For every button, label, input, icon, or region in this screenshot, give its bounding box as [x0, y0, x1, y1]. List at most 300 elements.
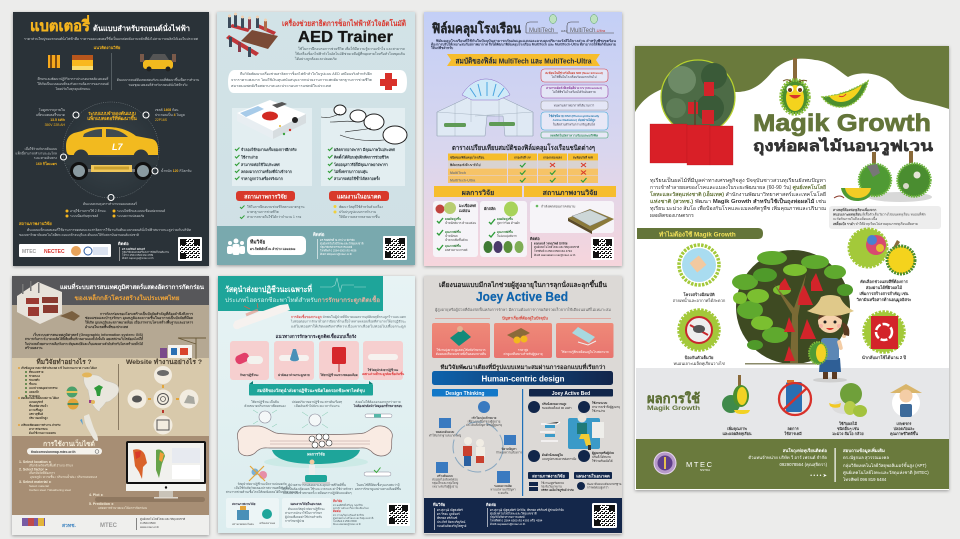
usage steps: 1. Select location ►	[19, 460, 52, 464]
badge text: reuse: นำกลับมาใช้ได้นาน 2 ปี	[862, 354, 906, 360]
card: oral medicine: กินยาปฏิชีวนะ	[240, 372, 259, 378]
badge text: pest	[673, 354, 725, 367]
intro paragraph	[649, 176, 827, 219]
contact: ติดต่อ	[313, 231, 325, 237]
label: research status	[528, 472, 569, 479]
method list: ความชื้นสูง	[29, 407, 43, 413]
feature list right	[333, 146, 395, 181]
bed features: แบบรูปทรงสะดวกต่อการนั่ง	[542, 457, 577, 461]
panel: research status	[530, 201, 614, 234]
property boxes: Active Radiation) ส่องผ่านได้สูง	[553, 117, 596, 123]
research status heading: สถานภาพงานวิจัย	[19, 221, 52, 226]
footer band: ประภัสร์ มิตรเจริญรัตน์	[437, 520, 465, 524]
feature list right: สามารถต่อใช้ซ้ำได้หลายครั้ง	[334, 175, 380, 181]
logos footer: ศูนย์เทคโนโลยีโลหะและวัสดุแห่งชาติ	[140, 517, 185, 522]
illustration: building under construction	[17, 281, 80, 324]
card: surgery	[274, 341, 314, 380]
contact: โทรศัพท์ 0 2564 6500 ต่อ 4636	[320, 248, 357, 252]
subheading: problems	[435, 314, 611, 322]
enquiry text: โทรศัพท์ 096 819 6484	[843, 476, 887, 482]
illustration: meeting room	[226, 12, 278, 57]
logo: MTEC: MTEC	[686, 460, 713, 469]
team and contact: พรรณี วงศ์ มหาวิทยาลัยเชียงใหม่	[333, 506, 369, 510]
step labels	[429, 415, 523, 495]
intro paragraph: ใช้ในการฝึกอบรมการช่วยชีวิต เพื่อให้มีความรู้ความเข้าใจ และสามารถ	[298, 46, 405, 51]
enquiry text: กลุ่มวิจัยเทคโนโลยีวัสดุพอลิเมอร์ขั้นสูง (APT)	[843, 462, 927, 469]
logo: MultiTech-Ultra: MultiTech-Ultra	[570, 28, 606, 34]
intro paragraph	[290, 313, 406, 328]
results band	[636, 368, 949, 439]
card: IV	[319, 341, 359, 380]
card: cost: ราคาสูง	[518, 348, 529, 352]
results text: ปลอดภัยและ	[893, 425, 915, 431]
results text: ใช้กับผลไม้	[839, 420, 858, 426]
button: future plan	[329, 191, 389, 201]
illustration: bone	[233, 303, 290, 329]
usage steps: แสดงการทำนายแนวโน้มการกัดกร่อน	[98, 506, 147, 510]
heading: battery: แบตเตอรี่	[30, 15, 91, 35]
intro paragraph: ให้แก่พืชสำหรับ	[431, 45, 453, 50]
results text: มะม่วง ส้มโอ กล้วย	[832, 430, 864, 436]
logos strip	[19, 244, 111, 257]
results label	[272, 450, 360, 464]
property boxes: สามารถตัดรังสีเหนือสีม่วง UV (Ultraviolet)	[546, 85, 602, 90]
panel: melon and tomato results: ผลสวยงาม เกรดดี	[445, 248, 467, 252]
research status text	[19, 226, 191, 238]
QR code	[178, 237, 202, 261]
spec text left 2	[16, 146, 57, 166]
panel: device features left	[232, 100, 312, 186]
spec text left 1: 350V 22B AH	[45, 123, 66, 127]
photo: durian tree with red bags	[661, 60, 735, 134]
status details: รองรับวันแรงงาน	[541, 484, 562, 488]
card: injuries: ต้องคอยเรียกคนช่วยทั้งในตอนกลางคืน	[436, 351, 486, 356]
heading: woven bag: ถุงห่อผลไม้นอนวูฟเวน	[753, 136, 934, 156]
QR code	[591, 237, 614, 260]
results text: ลดการ	[787, 426, 800, 431]
feature list right: ไม่ทิ้งคราบกาวบนหุ่น	[333, 168, 368, 175]
comparison table: กรองรังสี UV	[514, 156, 531, 160]
intro paragraph	[85, 310, 193, 329]
card: bed	[556, 323, 614, 358]
property text: ด้วยขนาดปริมาณยาเพียงหนอง	[244, 404, 286, 408]
bottom features: ระบบป้องกันทุกเซลล์	[70, 214, 98, 219]
panel: electrode features right	[321, 105, 407, 186]
callout: causes of durian damage: สาเหตุที่ต้องห่อทุเรียนเนื่องจาก	[833, 207, 876, 213]
QR code	[387, 503, 410, 526]
map of Thailand	[80, 372, 119, 441]
feature list right: ผลิตจากยางพารา มีคุณภาพในประเทศ	[334, 146, 395, 153]
method list: ชั้นบน	[29, 381, 37, 386]
method list: เปรียบเทียบผลการทำงาน สำหรับ	[21, 422, 61, 427]
banner: human-centric design	[432, 371, 613, 385]
footer band: กลุ่มวิจัยวิศวกรรมการแพทย์	[490, 515, 525, 520]
spec text left 1: แพ็กแบตเตอรี่ขนาด	[36, 111, 65, 117]
method list: ค่าการกัดกร่อน	[29, 427, 48, 431]
spec text left 2: 160 กิโลเมตร	[36, 161, 57, 166]
comparison table: ชนิดของฟิล์มคลุมโรงเรือน	[450, 154, 485, 160]
step labels: ระดมความคิด	[494, 483, 512, 488]
property boxes	[541, 69, 608, 138]
plan text: พัฒนาวัสดุที่ใช้สำหรับตัวเครื่อง	[339, 204, 383, 210]
logo: MultiTech-Ultra	[567, 14, 614, 34]
method list: แนวป่าเขตอุตสาหกรรม	[29, 385, 58, 391]
footer band: ดร.ศุภวุฒิ ณัฐพงศ์ศรี	[437, 508, 463, 513]
banner: human-centric design: Human-centric design	[482, 374, 565, 384]
diagram: car with battery pack	[63, 102, 159, 198]
concept text right: ต้นแบบรถยนต์ต้องทดสอบกับระบบที่พัฒนาขึ้นเพื่อการทำงาน	[117, 77, 200, 82]
URL search box	[27, 448, 102, 454]
step labels: ทดสอบต้นแบบ	[436, 429, 454, 434]
design thinking cycle	[429, 401, 523, 495]
panel: greenhouse film poster	[424, 12, 622, 266]
contact: อีเมล napongs@mtec.or.th	[122, 256, 154, 260]
results text	[722, 420, 918, 437]
method list: ต้องใช้งานความคงทน	[29, 430, 56, 435]
contact: โทรศัพท์ 0 2564 6500 ต่อ 4794	[534, 249, 572, 253]
heading bar: why use Magik Growth: ทำไมต้องใช้ Magik Growth	[659, 230, 736, 238]
footer band	[636, 439, 949, 489]
bed features	[528, 400, 620, 463]
banner: properties: สมบัติของวัสดุนำส่งยาปฏิชีวนะชนิดไฮดรอกซีอะพาไทต์ชุบ	[257, 387, 365, 394]
contact: ดอกเตอร์ วรรณวิทย์ นักวิจัย	[534, 242, 568, 246]
illustration: AED device	[237, 100, 306, 139]
research status text: ต้นแบบแพ็กแบตเตอรี่ใช้งานการทดสอบและสาธิตการใช้งานกับต้นแบบรถยนต์นั่งไฟฟ้าสมรรถนะสูงร่วมกับบริษัท	[27, 226, 191, 232]
intro paragraph: อำเภอในเขตพื้นที่ของประเทศ	[85, 323, 129, 329]
icons: spheres and bone	[253, 410, 392, 428]
contact: ศูนย์เทคโนโลยีโลหะและวัสดุแห่งชาติ	[534, 245, 579, 250]
bottom features: อายุใช้งานการใช้ 2 ล้านม.	[70, 209, 107, 214]
results label: ผลการวิจัย	[307, 452, 325, 456]
bed features: ใช้งานง่าย	[592, 409, 605, 413]
footer band: ศูนย์เทคโนโลยีโลหะและวัสดุแห่งชาติ	[490, 512, 537, 516]
plan details: การทดสอบสูงกว่า	[587, 486, 609, 490]
research status text: ของมหาวิทยาลัยเทคโนโลยีพระจอมเกล้าธนบุรีและต้นแบบให้กับสถาบันยานยนต์แห่งชาติ	[19, 232, 139, 238]
header band	[218, 276, 383, 311]
feature list left	[241, 146, 297, 182]
result text	[226, 482, 402, 496]
website flow diagram	[128, 366, 198, 434]
heading: Thai title: เตียงนอนแบบมีกลไกช่วยผู้สูงอายุในการลุกนั่งและลุกขึ้นยืน	[439, 279, 608, 290]
mascot: durian	[781, 58, 809, 114]
status details	[529, 481, 574, 493]
concept text left	[37, 76, 109, 92]
property boxes: ไม่ให้พื้นในโรงเรือนร้อนมากเกินไป	[551, 74, 597, 79]
heading bar: why use Magik Growth	[637, 228, 763, 239]
panel: corrosion map poster	[12, 276, 209, 535]
footer band	[217, 226, 415, 265]
badge text: structure: โครงสร้างมีสมบัติ	[682, 291, 715, 297]
heading band: status: สถานภาพงานวิจัย	[543, 189, 597, 197]
distributor text: ตัวแทนจำหน่าย บริษัท วี อาร์ เฟรนด์ จำกัด	[748, 455, 827, 460]
method list: เก็บข้อมูลจากสถานีทั่วประเทศ 3 ปี ในสภาพอากาศ 7 แห่ง ได้แก่	[21, 365, 97, 371]
property text: ปล่อยปริมาณยาปฏิชีวนะสารต้นเรื่อยๆ	[292, 399, 343, 405]
intro line: ผู้สูงอายุหรือผู้ป่วยที่ต้องพักฟื้นหลังการรักษา มีความต้องการการผลิตรวดเร็วจากใช้เตียงนอนที่ไม่เหมาะสม	[435, 306, 612, 313]
future plan card: สามารถนำมาใช้ในการรักษา	[285, 511, 323, 515]
icon: durian quality	[722, 375, 750, 414]
white info box: จากราคาแพงมาก โดยใช้เงินทุนสนับสนุนจากหน่วยงานการแพทย์มาตรฐานการช่วยชีวิต	[231, 77, 372, 83]
icon: mechanics and yellow car	[140, 54, 176, 72]
illustration: damaged durians	[834, 151, 932, 202]
badge: colour filter	[849, 229, 915, 274]
footer band: ดร.รัชตะ มูลจันทร์	[437, 512, 460, 516]
usage steps: 4. Plot ►	[89, 493, 104, 497]
usage steps: เลือกจังหวัดหรือพื้นที่ อำเภอ ตำบล	[29, 462, 73, 468]
badge: weather proof	[679, 245, 719, 285]
property text: ส่งผงไม่ให้ต้องเอาออกจากร่างกาย	[355, 400, 401, 404]
usage steps: 3. Select material ►	[19, 480, 52, 484]
future plan card: แผนงานวิจัยในอนาคต	[291, 501, 321, 506]
intro paragraph: ให้เกิด อุณหภูมิและสภาพแวดล้อม เมื่อเราทราบโครงสร้างพื้นฐานและอาคาร	[85, 318, 193, 326]
feature list left: จำลองใช้รองานครั้นของการฝึกจริง	[241, 146, 297, 152]
heading	[60, 282, 205, 302]
heading: ของเหล็กกล้าโครงสร้างในประเทศไทย	[74, 293, 180, 302]
car logo: L7	[112, 142, 123, 152]
usage steps: 2. Select factor ►	[19, 468, 48, 472]
result text: ไม่ต้องผ่าตัดซ้ำหลายครั้ง เหมือนการปฏิบัติแบบเดิมๆ	[281, 490, 352, 496]
heading band: results: ผลการวิจัย	[462, 189, 494, 197]
logo: MTEC: NSTDA	[700, 468, 710, 472]
icon: farmer	[890, 384, 922, 417]
panel: lettuce results: ผักสลัด	[484, 206, 496, 211]
badge text: colour: คัดเลือกช่วงแสงสีที่ต้องการ	[860, 278, 909, 284]
panel: melon and tomato results: น้ำหนักผล	[445, 233, 458, 238]
plan details: พัฒนาต้นแบบเตียงมาตรฐาน	[587, 482, 622, 486]
result text: ในคนไข้ที่มีติดเชื้อรุนแรงพบว่ามี	[356, 482, 400, 488]
distributor text: 0929078564 (คุณสุจิตรา)	[780, 462, 828, 468]
subheading: problems: ปัญหาเรื่องที่ต้องคู่ในปัจจุบัน	[502, 314, 548, 322]
step labels: กำหนดความต้องการ	[496, 450, 523, 454]
method list: แหล่งน้ำ	[29, 389, 40, 394]
enquiry text	[843, 447, 929, 482]
status text	[240, 204, 305, 219]
spec text left 1: โมดูลบรรจุภายใน	[39, 107, 66, 113]
status card	[226, 498, 279, 528]
usage steps: อุณหภูมิ / ความชื้น / ปริมาณน้ำฝน / ปริมาณลมทะเล	[30, 474, 97, 480]
method list	[18, 365, 97, 435]
banner: film properties	[447, 54, 600, 66]
callout: causes of durian damage: จะกัดกินภายในถึงเมล็ดและเนื้อ	[833, 215, 877, 221]
contact: กลุ่มวิจัยวิศวกรรมการแพทย์	[320, 245, 353, 250]
team box: ทีมวิจัย	[250, 238, 265, 246]
heading: AED red line: เครื่องช่วยสาธิตการช็อกไฟฟ้าหัวใจอัตโนมัติ	[282, 17, 406, 28]
panel: melon and tomato results	[433, 201, 478, 257]
step icons	[436, 401, 516, 483]
future plan card	[282, 498, 331, 528]
label: future plan	[574, 472, 612, 479]
badge text: structure	[673, 291, 726, 303]
heading band: status	[524, 186, 616, 197]
plan details	[577, 482, 622, 490]
button: future plan: แผนงานในอนาคต	[337, 192, 381, 200]
property text: ให้ยาปฏิชีวนะเป็นยืน	[251, 398, 280, 404]
heading: Magik Growth: Magik Growth	[753, 110, 931, 137]
heading: research team method: ทีมวิจัยทำอย่างไร ?	[36, 357, 92, 366]
step labels: หาแนวทางแก้ปัญหา	[490, 488, 516, 492]
result text: ผลการรักษาดูแลผ่านทางเลือดดีขึ้น	[355, 486, 402, 491]
status card: สถานะทดสอบในคน	[232, 522, 254, 526]
comparison table: ฟิล์มกรองรังสี UV ทั่วไป	[450, 162, 481, 167]
feature list left: ใช้งานง่าย	[241, 154, 258, 160]
property boxes: ลดผลิตในอัตราความร้อนและแก๊สพิษ	[550, 132, 598, 138]
card: injuries	[432, 323, 490, 358]
check marks left	[235, 148, 240, 180]
comparison table: MultiTech	[450, 171, 466, 175]
badge text: structure: ถ่ายเทน้ำและอากาศได้สะดวก	[673, 297, 726, 303]
label: design thinking	[432, 389, 498, 397]
intro paragraph: โลหะและวัสดุแห่งชาติ (เอ็มเทค) สำนักงานพัฒนาวิทยาศาสตร์และเทคโนโลยี	[649, 190, 826, 198]
icon: no chemicals	[779, 380, 811, 415]
heading: greenhouse film: ฟิล์มคลุมโรงเรือน	[432, 20, 521, 37]
QR code	[592, 503, 617, 528]
feature list right: ติดตั้งได้ดีบนหุ่นฝึกหัดการช่วยชีวิต	[333, 154, 389, 160]
callout: system heading: แพ็กแบตเตอรี่ที่พัฒนาขึ้น	[87, 114, 138, 121]
feature list left: ราคาถูกกว่าเครื่องจริงมาก	[241, 175, 284, 182]
intro paragraph: ทุเรียน มะม่วง ส้มโอ เพื่อป้องกันโรคและแมลงศัตรูพืช เพิ่มคุณภาพและปริมาณ	[650, 205, 826, 212]
property boxes: ในสัดส่วนสำหรับการเจริญเติบโต	[553, 122, 595, 126]
bed features: ดันตัวนั่งลงอยู่ใน	[542, 452, 563, 458]
bed features: ใช้งานระบบ	[592, 400, 607, 405]
logo: MultiTech	[526, 14, 558, 34]
illustration: training pads	[321, 105, 407, 144]
result text: ไม่จำเป็นต้องเปิดแผล ใช้ระยะเวลาและค่าใช้จ่ายรักษา	[280, 485, 353, 491]
concept text left: ศึกษาและพัฒนาปฏิกิริยาการประกอบเซลล์แบตเตอรี่	[38, 76, 109, 81]
banner: film properties: สมบัติของฟิล์ม MultiTech และ MultiTech-Ultra	[456, 56, 592, 66]
intro paragraph: ซ่อมแซมและบำรุงรักษา อุณหภูมิและความชื้นในอากาศเป็นปัจจัยที่มีผล	[85, 314, 193, 321]
subheading: ประเภทไฮดรอกซีอะพาไทต์สำหรับ การรักษากระดูกติดเชื้อ	[225, 294, 380, 305]
results text: คุณภาพชีวิตดีขึ้น	[890, 430, 918, 437]
team and contact: ศูนย์เทคโนโลยีโลหะและวัสดุแห่งชาติ	[333, 516, 374, 521]
panel: lettuce results: คุณภาพดีขึ้น	[497, 229, 513, 235]
feature list left: ลดลงมากกว่าเครื่องที่นำเข้าจาก	[241, 168, 293, 174]
panel: lettuce results: ผลผลิตสูงขึ้น	[497, 216, 513, 222]
icon: red cross	[380, 73, 397, 90]
status text: สามารถขายในใช้ได้กว่าจำนวน 1 ราย	[247, 215, 301, 219]
heading: treatments: แนวทางการรักษากระดูกติดเชื้อแบบเรื้อรัง	[276, 332, 356, 340]
button: research status	[236, 191, 295, 201]
panel: bone drug delivery poster	[218, 276, 415, 533]
panel: lettuce results: ใบอ่อนนุ่มดีมาก	[497, 234, 517, 239]
footer band: โทรศัพท์ 0 2564 6500 ต่อ 4393 หรือ 4394	[490, 518, 543, 522]
logo: and: และ	[561, 29, 567, 33]
result text: ผู้ป่วยสามารถปล่อยยาและคุณภาพชีวิตดีขึ้น	[288, 482, 347, 488]
label: Joey Active Bed: Joey Active Bed	[552, 391, 590, 397]
illustration: crane and charts	[160, 338, 206, 359]
subheading: Magik Growth: Magik Growth	[647, 405, 700, 412]
enquiry text: สอบถามข้อมูลเพิ่มเติม	[843, 447, 885, 454]
banner: properties	[249, 381, 373, 396]
badge: reusable bag	[864, 312, 904, 352]
icon: doctor with patient	[302, 460, 330, 484]
heading: AED Trainer: AED Trainer	[298, 29, 393, 46]
markers	[60, 112, 158, 200]
callout: causes of durian damage: หนอนเจาะผลทุเรียน ผีเสื้อตัวเต็มวัยวางไข่บนผลทุเรียน หนอนที่ฟัก	[833, 210, 926, 218]
concept text left: ให้เกิดเป็นแบบแผนที่รองรับความต้องการของรถยนต์	[37, 80, 109, 86]
intro paragraph: ใช้เครื่องช็อกไฟฟ้าหัวใจอัตโนมัติช่วยเหลือผู้ที่หยุดหายใจหรือหัวใจหยุดเต้น	[295, 50, 406, 57]
panel: melon and tomato results: น้ำตาลเพิ่มขึ้นด้วย	[445, 237, 468, 242]
spec text left 1: 13.5 kWh	[50, 118, 65, 122]
spec text right 1: 22P16S	[155, 118, 168, 122]
panel: battery prototype poster	[13, 12, 209, 266]
panel: corrosion map poster: สามารถวิเคราะห์ อาจจะผลิตได้ที่เพียงพื้นบริเวณตามแผนที่ ดังนั้นจึง เผยแพร่ผ่านเว็บไซต์ออนไลน์ให้	[25, 335, 144, 341]
footer band: อีเมล supawutn@mtec.or.th	[490, 522, 526, 526]
spec text left 2: เมื่อใช้ร่วมกับรถต้นแบบ	[25, 146, 57, 151]
result text: เมื่อใช้กับสัตว์ทดลองปราศจากผลที่เกิดขึ้น	[234, 485, 290, 490]
team and contact: อีเมล wanwis@mtec.or.th	[333, 522, 362, 526]
result text: สามารถช่วยต้านเชื้อโรคให้ลดน้อยลงได้ในปริมาณมาก	[226, 489, 298, 494]
white info box: สมาคมแพทย์เรือพยาบาลและประกอบการแพทย์ในประเทศ	[231, 83, 332, 88]
label: design thinking: Design Thinking	[446, 391, 484, 397]
status text: ใช้ในการฝึกอบรมช่วยชีวิตตามมาตรฐาน	[247, 204, 305, 209]
property boxes: สะท้อนในสีช่วงรังสีแดง NIR (Near Infrared)	[545, 70, 603, 75]
property boxes: ไม่ให้พืชในโรงเรือนได้รับอันตราย	[551, 89, 596, 94]
illustration: greenhouse	[437, 79, 533, 136]
method list: ชายแดน	[29, 394, 40, 398]
property text	[244, 398, 402, 409]
panel: corrosion map poster: สร้างผลงาน	[25, 345, 43, 350]
card: cost	[494, 323, 552, 358]
results text: เกษตรกร	[897, 421, 912, 426]
contact: โทร 0 2564 6500 ต่อ 4789	[122, 253, 154, 257]
intro paragraph: ทุเรียนเป็นผลไม้ที่มีมูลค่าทางเศรษฐกิจสูง ปัจจุบันชาวสวนทุเรียนยังพบปัญหา	[650, 176, 826, 184]
circles: map samples	[66, 386, 78, 410]
product: red woven bags	[650, 124, 733, 165]
logo: MultiTech: MultiTech	[529, 28, 554, 34]
footer band: ติดต่อ	[486, 502, 497, 507]
panel: lettuce results: สูงกว่าร้อย ด้านผัก	[497, 221, 520, 225]
spec text right 1: ประกอบเป็น 4 โมดูล	[155, 111, 185, 117]
intro paragraph	[294, 46, 406, 61]
step labels: ต่อยอดไอเดียทดสอบ	[432, 478, 458, 482]
intro paragraph: ฟิล์มคลุมโรงเรือนที่ใช้กันในปัจจุบันสามารถกันฝนและแสงและควบคุมปริมาณรังสีได้บางส่วน สำหรับพืชเขตร้อน	[436, 38, 617, 44]
property boxes: ใช้ดัชนีฉาย PAR (Photosynthetically	[549, 113, 600, 118]
comparison table: กรองกรองแสง	[543, 156, 562, 160]
status text: มาตรฐานการช่วยชีวิต	[247, 209, 279, 214]
panel: melon and tomato results: คุณภาพดีขึ้น	[445, 229, 461, 235]
heading: website method: Website ทำงานอย่างไร ?	[126, 357, 202, 366]
spec text left 1	[36, 107, 66, 127]
panel: melon and tomato results: ผลผลิตสูงขึ้น	[445, 216, 461, 222]
icon: healthy bone	[364, 468, 391, 476]
logos footer: www.mtec.or.th	[140, 525, 159, 529]
step labels: ทำให้มาตรฐานขนาดใหญ่	[429, 434, 462, 438]
contact	[118, 241, 169, 261]
car body	[66, 127, 158, 155]
status details: บริษัท เอเอ็มโซลูชั่นส์ จำกัด	[541, 487, 574, 493]
card: IV: ให้ยาปฏิชีวนะทางหลอดเลือด	[320, 372, 358, 378]
step labels: ระดมกัน	[498, 491, 508, 495]
contact: ดร.กิตติศักดิ์ ณ ลำปาง นักวิจัย	[320, 238, 355, 242]
method list: คัดเลือกและทดสอบสภาพ ได้แก่	[21, 395, 59, 400]
status card: สถานภาพงานวิจัย	[232, 501, 256, 506]
step labels: นิยามปัญหา	[501, 446, 517, 452]
property text: เมื่อเดินเข้าไปยังระยะเวลาวันนาน	[295, 403, 340, 408]
heading band: results	[434, 186, 522, 197]
logos footer: MTEC	[100, 523, 118, 529]
spec text left 2: แพ็กนี้สามารถทำงานระยะไกล	[16, 150, 57, 156]
URL search box: thaicorrosionmap.mtec.or.th	[31, 450, 76, 454]
results text: ใช้สารเคมี	[784, 430, 802, 436]
intro paragraph: แห่งชาติ (สวทช.) พัฒนา Magik Growth สำหรับใช้เป็นถุงห่อผลไม้ เช่น	[650, 197, 827, 205]
mascot: durian slice	[822, 81, 868, 107]
QR code	[383, 236, 407, 260]
team and contact	[333, 498, 374, 526]
bottom features: ระบบไฟฟ้าและแบบเชื่อมต่อรถยนต์	[117, 208, 165, 213]
contact: ดร.พงศ์พันธ์ ยศพงษ์	[122, 247, 145, 251]
contact	[529, 236, 579, 258]
intro paragraph	[431, 38, 617, 50]
logos footer: สวทช.	[62, 523, 77, 529]
